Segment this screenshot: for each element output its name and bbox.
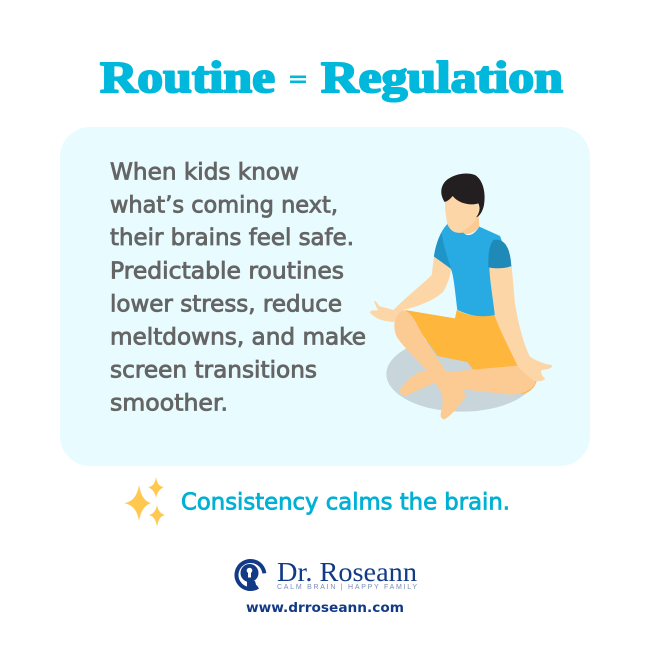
text block: routine explanation: what’s coming next, <box>110 190 338 218</box>
ground shadow <box>386 336 537 412</box>
neck <box>447 210 479 234</box>
text block: routine explanation: Predictable routines <box>110 256 344 284</box>
text block: routine explanation: smoother. <box>110 388 228 416</box>
back arm <box>370 257 451 322</box>
title: Regulation <box>321 53 563 102</box>
icon: sparkles <box>124 477 165 527</box>
text block: routine explanation <box>110 158 366 416</box>
title: Routine <box>100 53 275 102</box>
logo tagline: CALM BRAIN | HAPPY FAMILY <box>277 584 417 591</box>
face <box>445 196 479 233</box>
text block: routine explanation: screen transitions <box>110 356 317 384</box>
shirt <box>434 224 512 317</box>
illustration: meditating child <box>370 173 552 419</box>
logo: Dr. Roseann <box>231 556 418 594</box>
right sleeve <box>488 240 511 268</box>
logo wordmark: Dr. Roseann <box>277 557 418 587</box>
callout: consistency calms the brain: Consistency calms the brain. <box>181 490 510 516</box>
right arm and hand <box>489 266 552 381</box>
icon: head with keyhole <box>231 556 270 594</box>
text block: routine explanation: their brains feel safe. <box>110 223 354 251</box>
shirt left sleeve shade <box>434 233 451 269</box>
text block: routine explanation: lower stress, reduce <box>110 290 342 318</box>
panel: main message <box>60 127 590 466</box>
website url: www.drroseann.com <box>246 600 404 616</box>
text block: routine explanation: meltdowns, and make <box>110 322 366 350</box>
hair <box>441 173 485 217</box>
shorts <box>405 310 537 394</box>
legs <box>394 310 536 419</box>
text block: routine explanation: When kids know <box>110 158 299 186</box>
title <box>100 53 563 102</box>
